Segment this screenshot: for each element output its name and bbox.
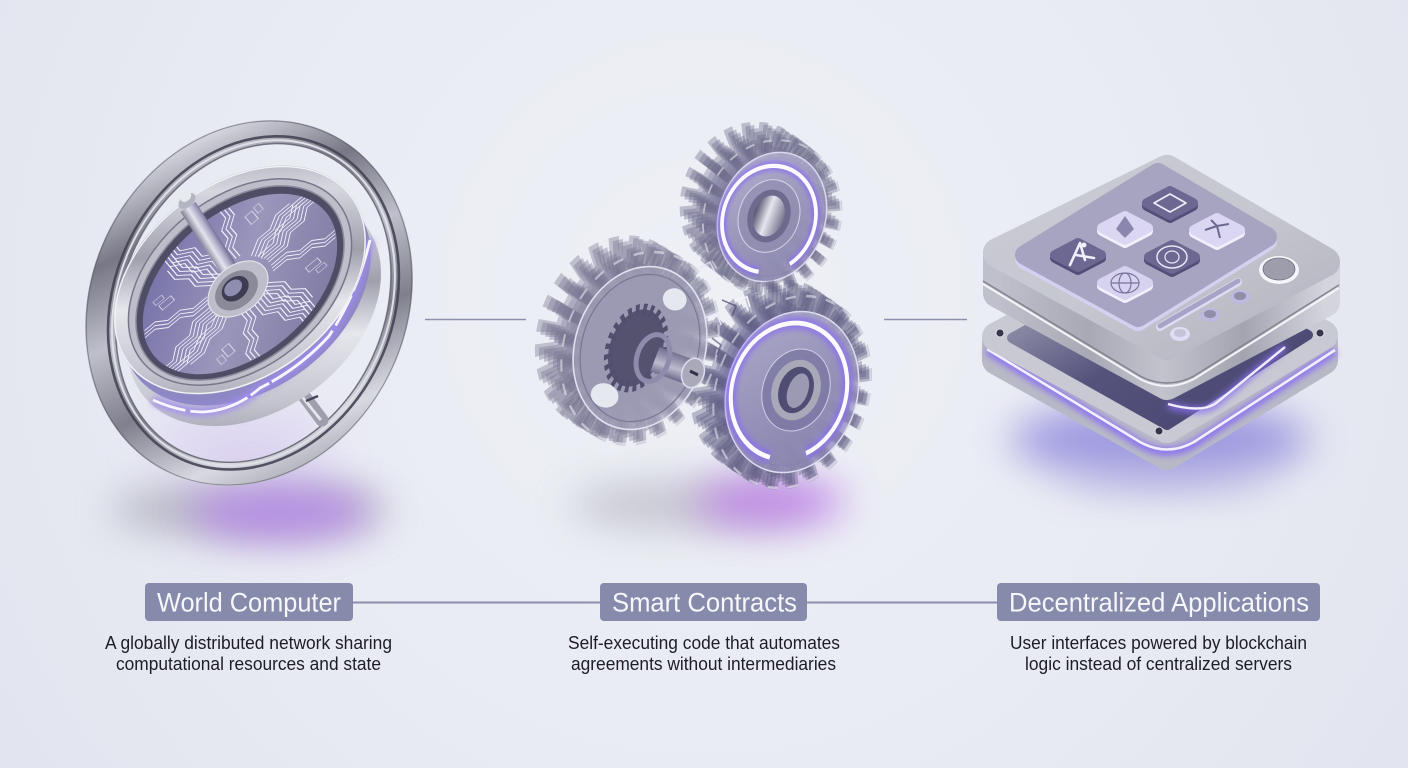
description: world computer bbox=[105, 633, 392, 674]
circuit traces bbox=[144, 196, 336, 372]
screws bbox=[996, 329, 1324, 435]
description: world computer: computational resources and state bbox=[116, 654, 381, 674]
top gear tooth edges bbox=[682, 121, 862, 313]
top gear extruded teeth bbox=[670, 115, 852, 302]
connector: lower label rail bbox=[353, 602, 997, 604]
connector: smart contracts to decentralized applications (upper) bbox=[884, 318, 967, 320]
gear floor shadow and purple glow bbox=[570, 478, 845, 529]
upper plate top face bbox=[998, 170, 1325, 345]
lower axle pin bbox=[296, 388, 322, 420]
device floor glow bbox=[1010, 402, 1310, 494]
bottom gear tooth edges bbox=[687, 274, 897, 510]
gimbal front ring bbox=[70, 118, 410, 442]
description: smart contracts bbox=[568, 633, 840, 674]
description: smart contracts: Self-executing code that automates bbox=[568, 633, 840, 653]
tile: calendar bbox=[1147, 191, 1193, 218]
lower plate recessed dark face bbox=[1012, 255, 1308, 425]
lower plate glowing strip bbox=[987, 349, 1335, 452]
label block: smart contracts bbox=[568, 583, 840, 674]
left gear shaft bbox=[630, 330, 708, 391]
description: world computer: A globally distributed network sharing bbox=[105, 633, 392, 653]
description: decentralized applications: User interfaces powered by blockchain bbox=[1010, 633, 1307, 653]
glass panel bbox=[1025, 173, 1267, 321]
label block: world computer bbox=[105, 583, 392, 674]
upper axle shaft bbox=[175, 190, 234, 277]
left gear bbox=[522, 228, 745, 466]
tile: coin globe bbox=[1149, 245, 1195, 272]
left gear extruded teeth bbox=[522, 228, 733, 453]
lower plate base bbox=[997, 250, 1323, 455]
bottom gear face bbox=[705, 294, 879, 490]
round knob bbox=[1259, 256, 1299, 284]
tile: globe bbox=[1102, 271, 1148, 298]
bottom gear extruded teeth bbox=[677, 272, 885, 497]
top gear bbox=[670, 115, 862, 313]
pill: smart contracts: Smart Contracts bbox=[612, 588, 797, 618]
left gear tooth edges bbox=[535, 230, 745, 466]
top gear bearing bbox=[728, 171, 810, 261]
slider slot bbox=[1160, 281, 1238, 327]
lower plate inner lit strip bbox=[1168, 347, 1285, 410]
app tiles bbox=[1055, 191, 1240, 298]
illustration: decentralized app device bbox=[983, 170, 1339, 494]
bottom gear bearing bbox=[751, 339, 841, 441]
pill: world computer: World Computer bbox=[157, 588, 341, 618]
pill: decentralized applications: Decentralized Applications bbox=[1009, 588, 1309, 618]
bottom right gear bbox=[677, 272, 897, 510]
illustration: smart contract gears bbox=[522, 115, 897, 529]
circuit disc bbox=[142, 194, 338, 374]
gear mesh highlights bbox=[700, 262, 750, 355]
outer metal ring bbox=[26, 66, 472, 540]
label block: decentralized applications bbox=[997, 583, 1320, 674]
connector: world computer to smart contracts (upper) bbox=[425, 318, 526, 320]
description: decentralized applications bbox=[1010, 633, 1307, 674]
lower plate bbox=[987, 250, 1335, 455]
lower plate top face bbox=[997, 250, 1323, 428]
tile: ethereum diamond bbox=[1102, 216, 1148, 243]
gyroscope floor shadow and purple glow bbox=[110, 415, 390, 540]
small control buttons bbox=[1170, 290, 1250, 341]
gimbal rim with glowing tube bbox=[77, 131, 426, 474]
left gear inner pinion bbox=[598, 302, 674, 394]
top gear face bbox=[700, 137, 844, 297]
left gear face with spokes bbox=[553, 249, 727, 447]
upper plate side bbox=[983, 170, 1339, 386]
bottom gear neon ring bbox=[713, 308, 865, 474]
tile: network nodes bbox=[1194, 218, 1240, 245]
description: decentralized applications: logic instead of centralized servers bbox=[1025, 654, 1292, 674]
tile: compass figure bbox=[1055, 242, 1101, 270]
central hub bbox=[197, 250, 279, 328]
illustration: gyroscope world computer bbox=[85, 120, 413, 567]
description: smart contracts: agreements without intermediaries bbox=[571, 654, 836, 674]
top gear neon ring bbox=[707, 153, 831, 285]
